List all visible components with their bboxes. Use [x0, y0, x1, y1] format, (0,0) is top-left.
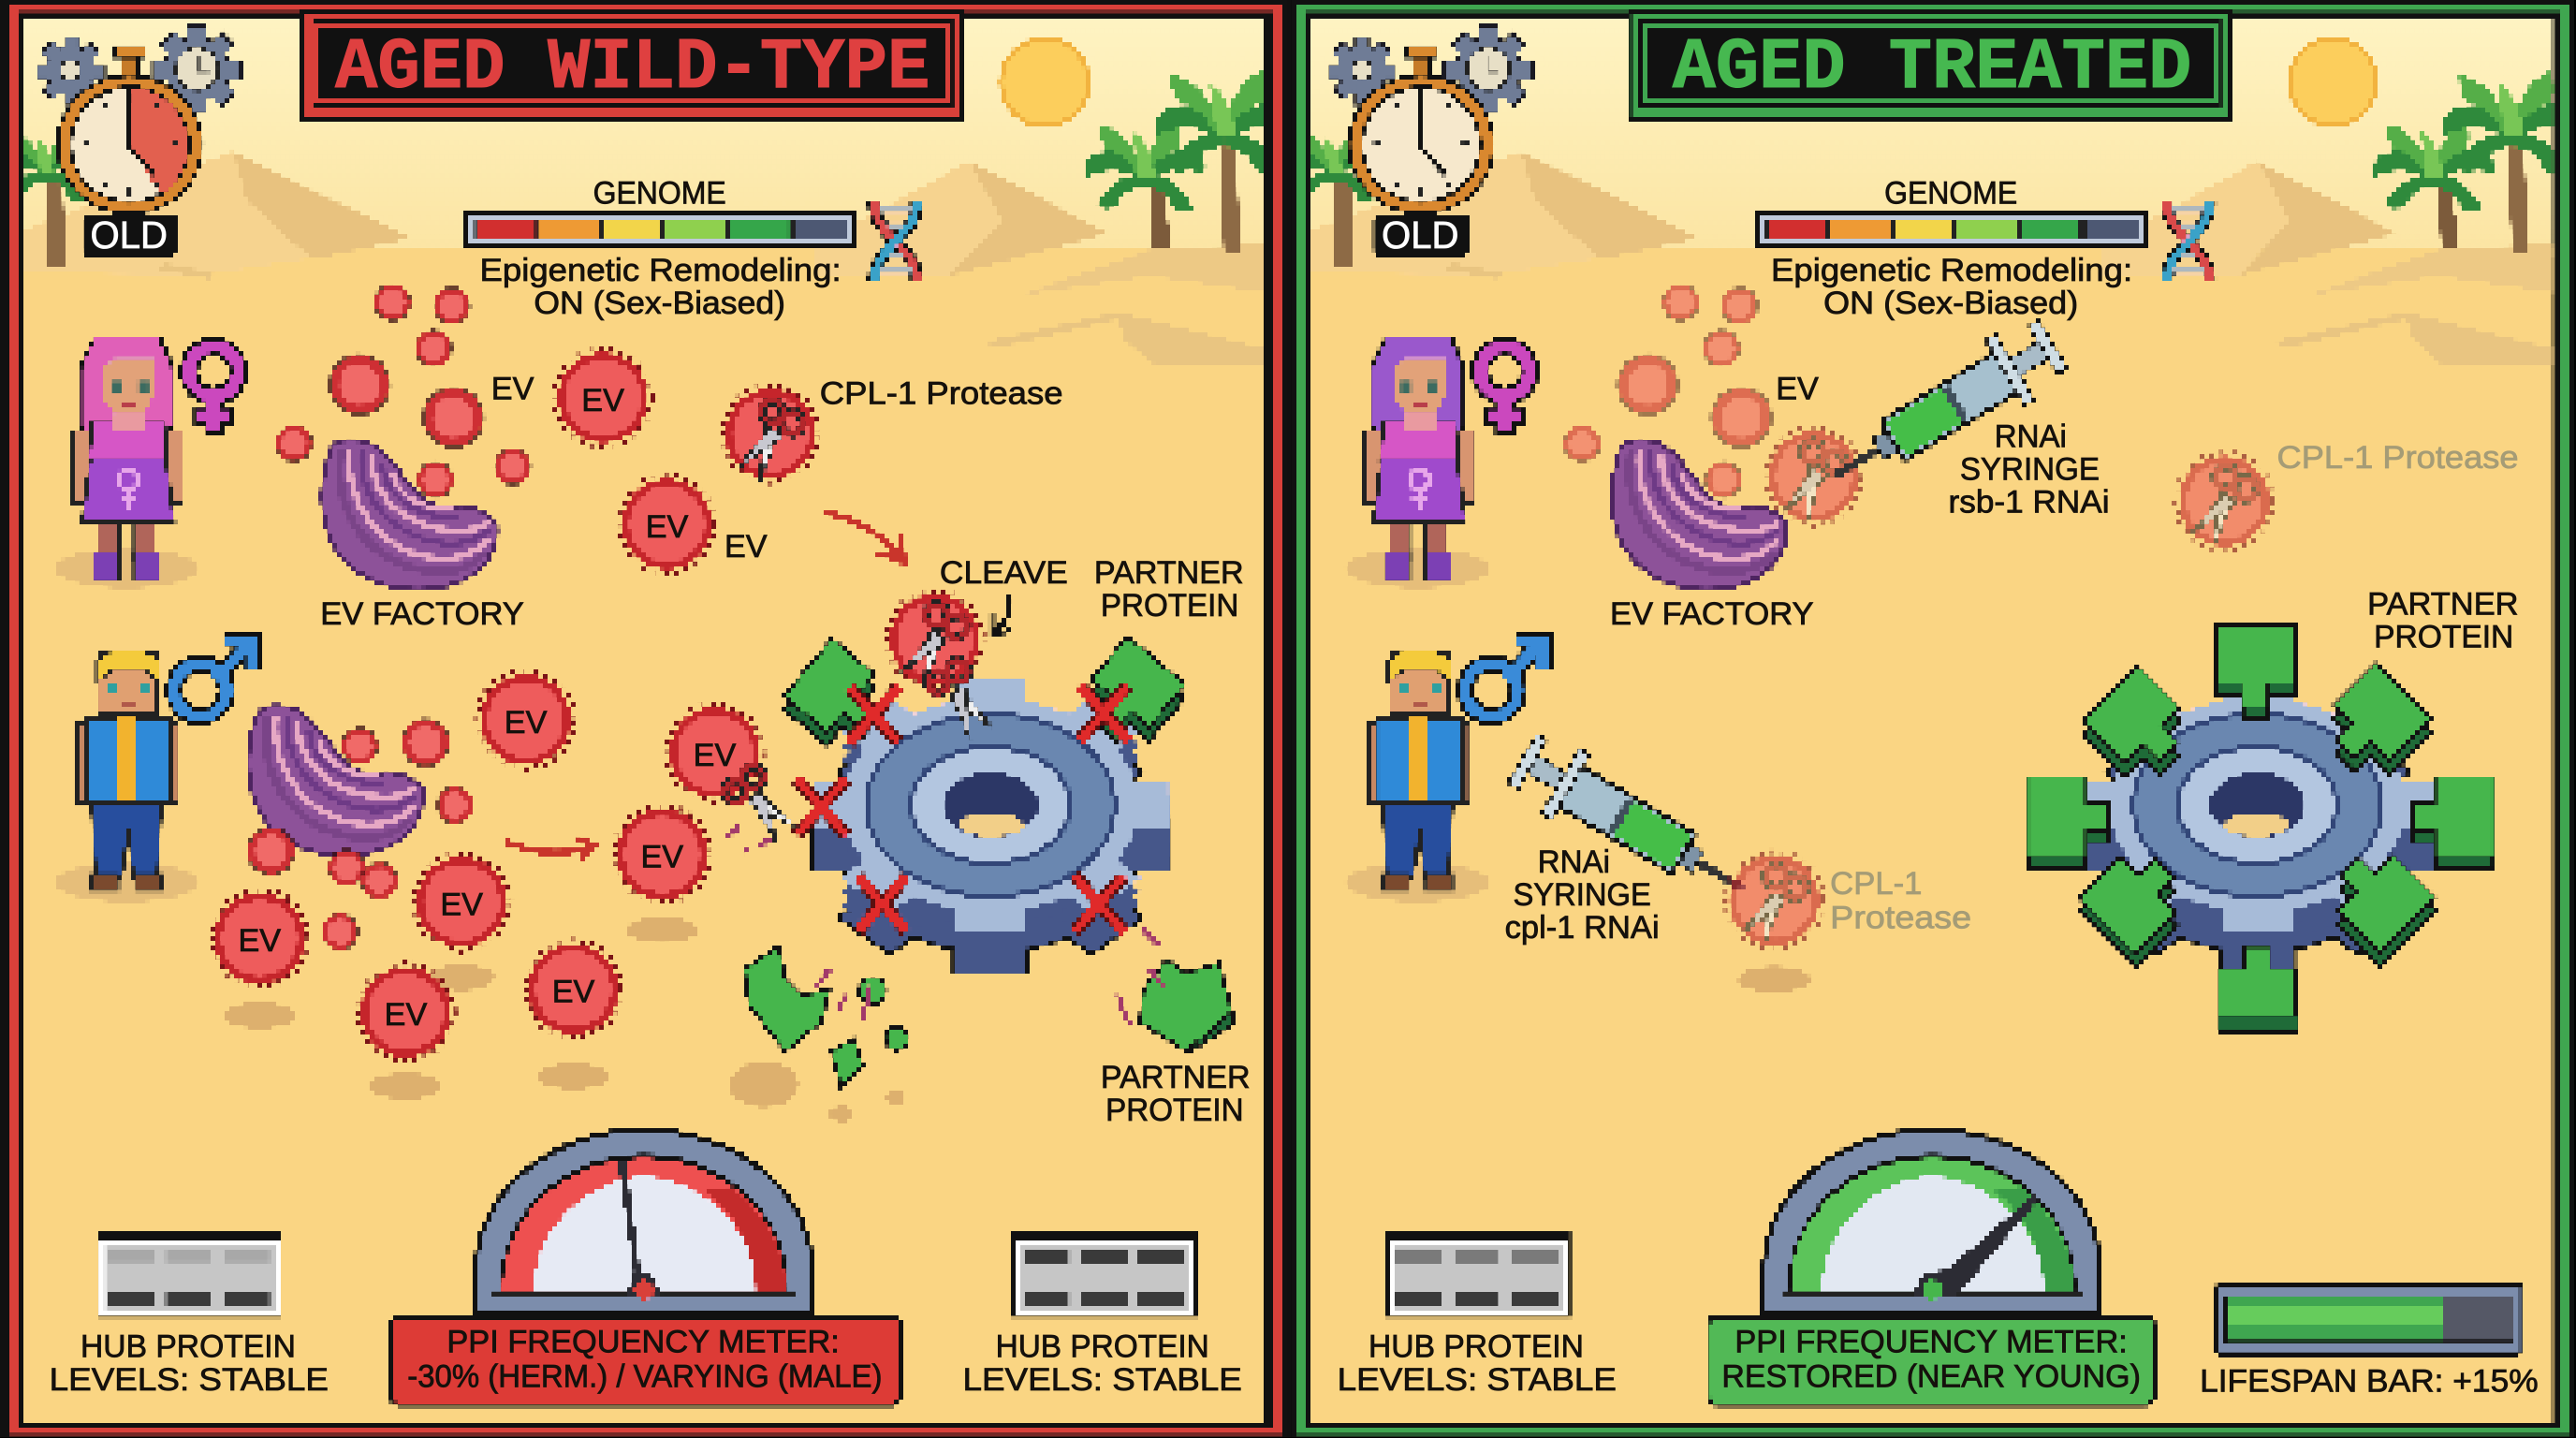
genome label: GENOME: [593, 176, 726, 212]
title plate: [300, 10, 964, 122]
EV factory label: EV FACTORY: [320, 596, 524, 632]
partner protein label: top: PARTNER: [1094, 555, 1244, 591]
icon: female symbol: [1480, 346, 1530, 433]
faded protease with shadow: [1726, 852, 1822, 992]
panel border ring: [1296, 4, 2571, 1434]
lifespan label: LIFESPAN BAR: +15%: [2200, 1364, 2539, 1400]
hub protein label: right: HUB PROTEIN: [996, 1329, 1209, 1365]
artwork: aged treated: [1286, 0, 2576, 1438]
syringe label: rsb-1: RNAi: [1995, 418, 2067, 454]
desert background with sun, dunes and palms: [0, 18, 1294, 1421]
partner protein: upper right: [1077, 636, 1185, 757]
bar: genome track: [1756, 211, 2149, 250]
syringe label: rsb-1: rsb-1 RNAi: [1949, 485, 2110, 521]
faded protease label: CPL-1: [1830, 866, 1922, 902]
western blot: left: [97, 1231, 283, 1318]
restored partner proteins: [2027, 624, 2494, 1032]
faded CPL-1 label: CPL-1 Protease: [2277, 440, 2519, 476]
meter caption: [407, 1324, 882, 1394]
meter caption: [1721, 1324, 2141, 1394]
EV label: EV: [1776, 371, 1819, 406]
epigenetic remodeling text: ON (Sex-Biased): [1823, 286, 2078, 321]
epigenetic remodeling text: [1771, 253, 2132, 321]
syringe label: cpl-1: [1505, 844, 1660, 946]
partner protein label: top: [1094, 555, 1244, 624]
panel: aged wild-type: [0, 0, 1294, 1438]
cleaved partner fragments: [744, 946, 1232, 1088]
EV particles (male): [212, 671, 710, 1061]
syringe label: rsb-1: SYRINGE: [1960, 451, 2100, 487]
meter caption plate: [391, 1316, 900, 1405]
hub protein label: LEVELS: STABLE: [1338, 1362, 1617, 1398]
old label: OLD: [1382, 213, 1459, 257]
EV labels: EV: [724, 529, 768, 565]
character: female worm: [1345, 335, 1490, 588]
syringe: cpl-1 RNAi: [1503, 726, 1763, 921]
EV labels: EV: [640, 840, 683, 875]
EV labels: EV: [646, 509, 689, 545]
hub protein label: right: [962, 1329, 1242, 1398]
meter caption: PPI FREQUENCY METER:: [446, 1324, 840, 1359]
partner protein label: top: PROTEIN: [1101, 588, 1238, 624]
hub protein label: left: LEVELS: STABLE: [50, 1362, 329, 1398]
meter caption: RESTORED (NEAR YOUNG): [1721, 1358, 2141, 1394]
icon: male symbol: [1466, 639, 1544, 716]
partner protein label: bottom: PARTNER: [1101, 1060, 1251, 1095]
meter caption: PPI FREQUENCY METER:: [1734, 1324, 2128, 1359]
partner protein label: PROTEIN: [2374, 620, 2513, 655]
arrow: cleave pointer: [992, 594, 1011, 634]
faded protease label: [1830, 866, 1971, 936]
character: female worm: [54, 335, 198, 588]
partner protein label: bottom: PROTEIN: [1105, 1093, 1244, 1128]
faded EV vesicles: [1563, 284, 1773, 499]
meter caption: -30% (HERM.) / VARYING (MALE): [407, 1358, 882, 1394]
icon: female symbol: [189, 346, 238, 433]
EV labels: EV: [491, 371, 534, 406]
old label: OLD: [91, 213, 168, 257]
text labels: aged treated: [1338, 28, 2539, 1400]
small EV vesicles (female): [275, 284, 532, 499]
cleave label: CLEAVE: [940, 555, 1068, 591]
panel frame: green: [1290, 0, 2576, 1438]
epigenetic remodeling text: [479, 253, 842, 321]
faded protease label: Protease: [1830, 901, 1971, 936]
ground shadows: [224, 917, 905, 1123]
partner protein label: PARTNER: [2367, 586, 2519, 622]
CPL-1 protease cleaving at the hub: [886, 591, 1001, 746]
artwork: aged wild-type: [0, 0, 1294, 1438]
icon: EV factory: [1612, 440, 1786, 590]
icon: DNA helix: [2167, 202, 2210, 281]
syringe label: rsb-1: [1949, 418, 2110, 521]
panel: aged treated: [1286, 0, 2576, 1438]
small EV vesicles (male): [246, 718, 474, 950]
partner protein label: [2367, 586, 2519, 655]
title: AGED WILD-TYPE: [335, 28, 929, 110]
arrow: male EV flow: [506, 838, 594, 859]
icon: EV factory (male): [248, 706, 423, 856]
lifespan bar: [2215, 1284, 2524, 1356]
panel frame: red: [0, 0, 1290, 1438]
text labels: aged wild-type: [50, 28, 1251, 1398]
X marks: broken interactions: [797, 685, 1129, 932]
EV labels: EV: [552, 975, 595, 1010]
EV labels: EV: [440, 888, 483, 923]
hub protein label: HUB PROTEIN: [1368, 1329, 1584, 1365]
icon: stopwatch with cogs: [36, 23, 242, 257]
western blot: [1385, 1231, 1571, 1318]
partner protein: upper left: [783, 638, 892, 759]
title plate: [1628, 10, 2232, 122]
icon: DNA helix: [874, 202, 916, 281]
EV factory label: EV FACTORY: [1610, 596, 1814, 632]
icon: EV factory (female): [322, 440, 497, 590]
icon: male symbol: [174, 639, 253, 716]
epigenetic remodeling text: Epigenetic Remodeling:: [479, 253, 842, 288]
EV labels: EV: [694, 738, 736, 773]
character: male worm: [1345, 651, 1490, 902]
EV labels: EV: [505, 705, 548, 741]
epigenetic remodeling text: ON (Sex-Biased): [534, 286, 785, 321]
title: AGED TREATED: [1673, 28, 2191, 110]
EV particles (female): [554, 349, 715, 573]
epigenetic remodeling text: Epigenetic Remodeling:: [1771, 253, 2132, 288]
icon: stopwatch with cogs: [1327, 23, 1533, 257]
EV labels: EV: [238, 923, 281, 959]
EV labels: [238, 371, 768, 1033]
faded protease under syringe: [1765, 428, 1862, 528]
EV labels: EV: [385, 997, 427, 1033]
desert background with sun, dunes and palms: [1286, 18, 2576, 1421]
syringe: rsb-1 RNAi: [1814, 312, 2072, 509]
EV labels: EV: [581, 383, 624, 418]
arrow: toward hub: [825, 513, 903, 562]
syringe label: cpl-1: RNAi: [1538, 844, 1610, 880]
hub gear with cut partner sites: [813, 678, 1168, 973]
hub protein label: right: LEVELS: STABLE: [962, 1362, 1242, 1398]
gauge: PPI frequency meter: [473, 1127, 815, 1314]
hub gear: [2080, 678, 2435, 973]
syringe label: cpl-1: SYRINGE: [1513, 877, 1651, 913]
gauge: PPI frequency meter: [1761, 1127, 2103, 1314]
faded CPL-1 protease: [2176, 453, 2273, 552]
partner protein label: bottom: [1101, 1060, 1251, 1128]
bar: genome track: [465, 211, 857, 250]
hub protein label: left: [50, 1329, 329, 1398]
character: male worm: [54, 651, 198, 902]
EV with scissors attacking the hub: [666, 704, 804, 850]
panel border ring: [8, 4, 1281, 1434]
CPL-1 protease label: CPL-1 Protease: [820, 376, 1063, 412]
CPL-1 protease with scissors: [722, 386, 819, 487]
hub protein label: left: HUB PROTEIN: [80, 1329, 296, 1365]
hub protein label: [1338, 1329, 1617, 1398]
western blot: right: [1012, 1231, 1197, 1318]
meter caption plate: [1708, 1316, 2154, 1405]
syringe label: cpl-1: cpl-1 RNAi: [1505, 910, 1660, 946]
cut debris marks: [726, 827, 1164, 1027]
genome label: GENOME: [1884, 176, 2017, 212]
